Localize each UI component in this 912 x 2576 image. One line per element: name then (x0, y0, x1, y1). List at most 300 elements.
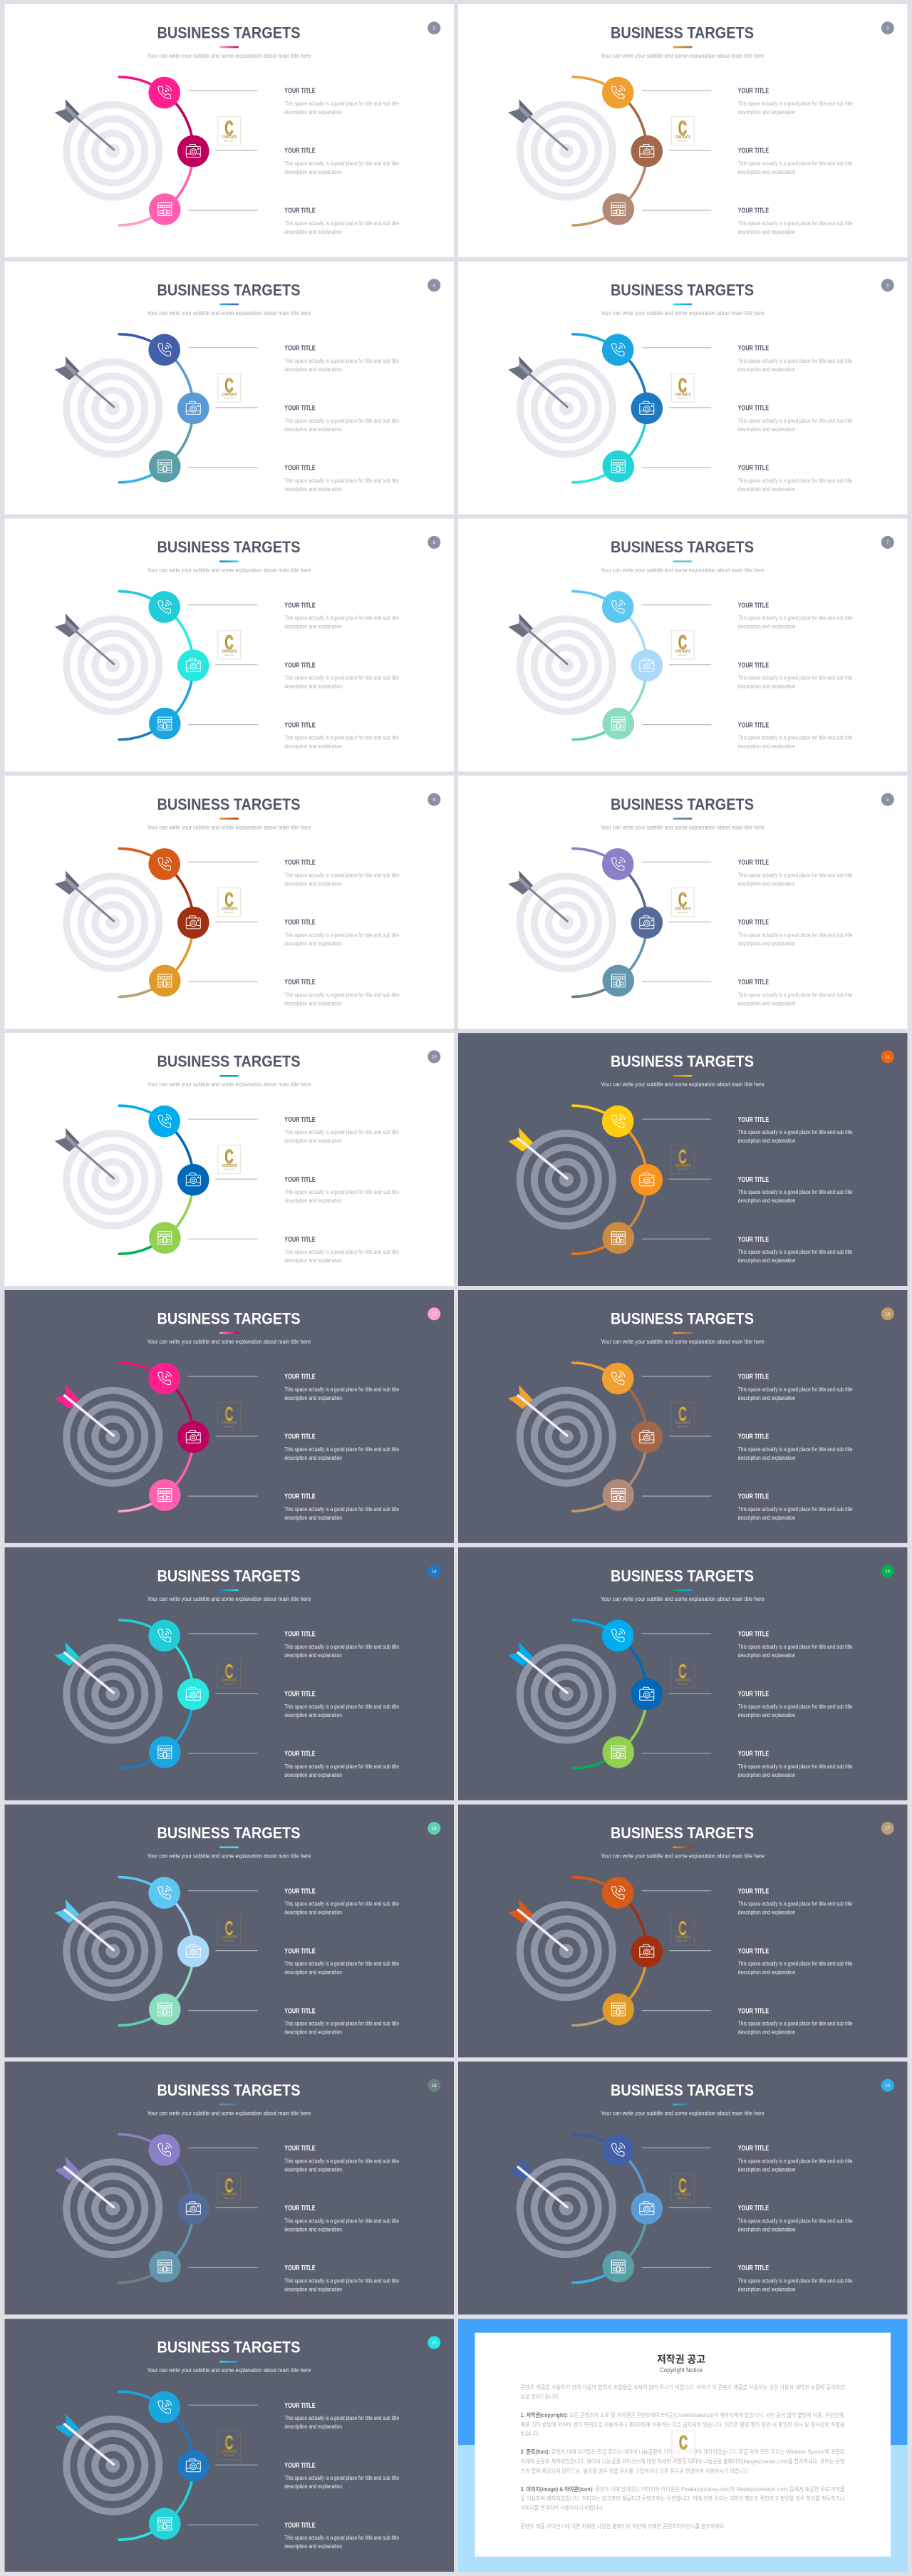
text block 1: description and explanation (738, 366, 795, 373)
target (63, 1387, 162, 1487)
node: camera (631, 1164, 663, 1196)
text block 1: YOUR TITLE (738, 858, 769, 867)
logo: CONTENTS (675, 135, 691, 140)
text block 2 (284, 661, 399, 690)
logo: C (678, 1917, 687, 1939)
panel: slide 8 light rust (4, 776, 454, 1029)
leader lines (188, 348, 258, 468)
logo: MAIL LIST (678, 1682, 688, 1685)
logo: CONTENTS (222, 650, 237, 654)
logo: CONTENTS (675, 1164, 691, 1168)
page badge: 15 (885, 1570, 891, 1574)
node: camera (631, 907, 663, 939)
text block 1 (738, 2144, 853, 2173)
arrow (508, 1642, 567, 1693)
text block 3: YOUR TITLE (284, 1493, 316, 1501)
text block 2 (284, 2461, 399, 2490)
logo: C (225, 1145, 234, 1168)
text block 1 (738, 1373, 853, 1401)
target (63, 101, 162, 201)
text block 2: description and explanation (738, 2226, 795, 2232)
text block 3: This space actually is a good place for title and sub title (738, 735, 853, 741)
text block 1: description and explanation (284, 1652, 342, 1659)
title: BUSINESS TARGETS (611, 2081, 754, 2099)
title: BUSINESS TARGETS (611, 1053, 754, 1071)
logo: MAIL LIST (678, 140, 688, 143)
text block 1: description and explanation (738, 1395, 795, 1401)
arrow (508, 99, 567, 150)
text block 1 (284, 1373, 399, 1401)
arrow (55, 2413, 113, 2464)
node: shop (603, 1994, 634, 2025)
text block 1: YOUR TITLE (284, 344, 316, 352)
panel: slide 2 light pink (4, 4, 454, 257)
text block 1 (738, 601, 853, 630)
node: shop (149, 1479, 181, 1511)
logo: MAIL LIST (224, 911, 234, 914)
text block 3: This space actually is a good place for title and sub title (738, 478, 853, 484)
subtitle: Your can write your subtitle and some explanation about main title here (147, 567, 311, 574)
text block 2: This space actually is a good place for title and sub title (284, 2475, 399, 2481)
title: BUSINESS TARGETS (157, 24, 301, 41)
subtitle: Your can write your subtitle and some explanation about main title here (147, 1081, 311, 1088)
text block 2: YOUR TITLE (738, 918, 769, 927)
arc (119, 2134, 193, 2282)
leader lines (188, 2405, 258, 2525)
text block 1: This space actually is a good place for title and sub title (284, 358, 399, 364)
page badge: 11 (886, 1056, 891, 1060)
arrow (55, 2156, 113, 2207)
node: shop (149, 1222, 181, 1254)
text block 2: This space actually is a good place for title and sub title (284, 2217, 399, 2224)
logo: C (678, 632, 687, 654)
text block 1 (284, 87, 399, 115)
text block 1 (738, 858, 853, 887)
copyright subheading: Copyright Notice (660, 2366, 703, 2374)
logo: MAIL LIST (224, 1939, 234, 1942)
logo: C (678, 117, 687, 139)
target (63, 2416, 162, 2515)
logo: C (225, 1660, 234, 1682)
logo: MAIL LIST (224, 1168, 234, 1171)
subtitle: Your can write your subtitle and some explanation about main title here (601, 2109, 765, 2116)
node: camera (631, 649, 663, 681)
text block 3: description and explanation (284, 229, 342, 235)
panel: slide 9 light purple (458, 776, 908, 1029)
page badge (881, 536, 894, 549)
text block 1: description and explanation (284, 2423, 342, 2430)
page badge: 5 (886, 284, 889, 288)
node: shop (603, 193, 634, 225)
subtitle: Your can write your subtitle and some explanation about main title here (601, 1338, 765, 1345)
text block 2: description and explanation (738, 1712, 795, 1719)
target (63, 358, 162, 458)
arc (573, 848, 647, 996)
arc (119, 1877, 193, 2026)
arc (119, 2391, 193, 2540)
text block 1: This space actually is a good place for title and sub title (284, 615, 399, 622)
text block 1 (738, 1116, 853, 1144)
logo (671, 1402, 694, 1431)
copyright body text (521, 2384, 845, 2530)
leader lines (642, 1891, 711, 2011)
text block 2: description and explanation (284, 1712, 342, 1719)
page badge (428, 1051, 440, 1063)
text block 3 (738, 207, 853, 235)
copyright body text: 3. 이미지(image) & 아이콘(icon): 콘텐츠 내에 담겨있는 이미지와 아이콘은 Pixabay(pixabay.com)와 Webalys(webalys.com) 등에서 제공한 무료 저작물 (521, 2485, 845, 2493)
target (517, 101, 616, 201)
arrow (55, 99, 114, 150)
title: BUSINESS TARGETS (611, 281, 754, 299)
text block 1 (738, 1629, 853, 1659)
text block 3: This space actually is a good place for title and sub title (738, 2021, 853, 2027)
text block 1 (284, 2144, 399, 2173)
arrow (55, 1642, 113, 1693)
accent bar (219, 818, 239, 820)
text block 3 (284, 207, 399, 235)
target (63, 872, 162, 972)
text block 2: description and explanation (284, 2226, 342, 2232)
logo: CONTENTS (675, 1679, 691, 1683)
node: camera (177, 1421, 209, 1453)
text block 2 (284, 1947, 399, 1976)
leader lines (188, 91, 258, 210)
arrow (508, 870, 567, 921)
panel: slide 4 light blue (4, 262, 454, 515)
text block 2: description and explanation (284, 169, 342, 175)
page badge: 19 (885, 2084, 891, 2088)
subtitle: Your can write your subtitle and some explanation about main title here (601, 1595, 765, 1602)
node: shop (149, 2251, 181, 2282)
text block 1: This space actually is a good place for title and sub title (738, 2158, 853, 2164)
text block 1 (284, 858, 399, 887)
node: camera (177, 1935, 209, 1967)
logo: C (679, 2431, 688, 2453)
logo (671, 1145, 694, 1173)
text block 1: This space actually is a good place for title and sub title (284, 1129, 399, 1135)
text block 2: YOUR TITLE (284, 661, 316, 669)
logo: MAIL LIST (678, 1426, 688, 1428)
text block 1: description and explanation (738, 2166, 795, 2173)
text block 1: YOUR TITLE (738, 1887, 769, 1895)
text block 2 (284, 1433, 399, 1461)
text block 2: This space actually is a good place for title and sub title (284, 160, 399, 167)
text block 2: YOUR TITLE (738, 1175, 769, 1184)
copyright body text: 이미지를 변경하여 사용하시기 바랍니다. (521, 2504, 604, 2511)
page badge (428, 279, 440, 292)
logo (218, 888, 241, 917)
arc (119, 334, 193, 483)
text block 1: This space actually is a good place for title and sub title (738, 1901, 853, 1907)
text block 2: YOUR TITLE (284, 2461, 316, 2470)
arrow (508, 1900, 567, 1950)
page badge: 10 (432, 1056, 437, 1060)
subtitle: Your can write your subtitle and some explanation about main title here (147, 2366, 311, 2374)
node: camera (177, 907, 209, 939)
text block 1: This space actually is a good place for title and sub title (284, 872, 399, 878)
text block 1: description and explanation (284, 366, 342, 373)
node: phone (602, 2134, 634, 2166)
text block 3 (284, 1235, 399, 1264)
text block 2: description and explanation (738, 426, 795, 433)
panel: slide 13 dark orange (458, 1290, 908, 1543)
text block 2: This space actually is a good place for title and sub title (738, 1446, 853, 1453)
text block 3 (738, 1749, 853, 1778)
text block 3: This space actually is a good place for title and sub title (284, 2535, 399, 2541)
text block 3 (738, 721, 853, 750)
arrow (55, 1128, 114, 1178)
text block 2: description and explanation (284, 1197, 342, 1204)
page badge (881, 1565, 894, 1577)
text block 2 (738, 403, 853, 433)
page badge (881, 1822, 894, 1835)
text block 3: YOUR TITLE (738, 2264, 769, 2272)
logo: MAIL LIST (678, 2197, 688, 2200)
text block 3 (738, 2006, 853, 2036)
text block 3: This space actually is a good place for title and sub title (738, 1763, 853, 1770)
node: shop (149, 193, 181, 225)
page badge (428, 1822, 440, 1835)
logo: CONTENTS (675, 1936, 691, 1940)
text block 2: This space actually is a good place for title and sub title (738, 2217, 853, 2224)
accent bar (673, 1075, 693, 1077)
text block 1: This space actually is a good place for title and sub title (284, 2158, 399, 2164)
text block 1 (284, 1629, 399, 1659)
node: phone (148, 1619, 180, 1652)
text block 1 (738, 1887, 853, 1916)
text block 3 (284, 1749, 399, 1778)
page badge: 6 (433, 541, 436, 545)
text block 2: description and explanation (284, 426, 342, 433)
title: BUSINESS TARGETS (157, 281, 301, 299)
logo: C (678, 1660, 687, 1682)
panel: copyright notice (458, 2319, 908, 2572)
text block 3: YOUR TITLE (738, 1750, 769, 1758)
target (517, 1387, 616, 1487)
page badge (428, 21, 440, 34)
logo (218, 373, 241, 402)
leader lines (642, 1634, 711, 1753)
text block 2: description and explanation (738, 169, 795, 175)
text block 1: This space actually is a good place for title and sub title (738, 1644, 853, 1650)
text block 3: This space actually is a good place for title and sub title (284, 991, 399, 998)
page badge (881, 21, 894, 34)
text block 1: This space actually is a good place for title and sub title (738, 872, 853, 878)
text block 2: This space actually is a good place for title and sub title (738, 1704, 853, 1710)
target (517, 1644, 616, 1743)
logo (671, 116, 694, 145)
text block 1: YOUR TITLE (284, 601, 316, 609)
text block 2: YOUR TITLE (284, 147, 316, 155)
copyright body text: 자체의 글꼴로 제작되었습니다. 네이버 나눔글꼴 라이선스에 대한 자세한 사항은 네이버 나눔글꼴 홈페이지(hangeul.naver.com)를 참조하세요. 폰트는 콘텐 (521, 2458, 845, 2465)
text block 3: This space actually is a good place for title and sub title (284, 1506, 399, 1513)
node: camera (177, 1678, 209, 1710)
text block 3: YOUR TITLE (738, 2006, 769, 2015)
arrow (508, 356, 567, 407)
accent bar (673, 818, 693, 820)
logo: MAIL LIST (224, 654, 234, 656)
text block 3: This space actually is a good place for title and sub title (738, 1506, 853, 1513)
logo: C (225, 1403, 234, 1425)
text block 2 (738, 1947, 853, 1976)
text block 2: description and explanation (284, 684, 342, 690)
text block 3 (284, 463, 399, 493)
logo: MAIL LIST (678, 1168, 688, 1171)
page badge: 9 (886, 798, 889, 803)
panel: slide 17 dark rust (458, 1805, 908, 2057)
arc (119, 592, 193, 740)
node: shop (603, 2251, 634, 2282)
leader lines (642, 348, 711, 468)
text block 3 (738, 1235, 853, 1264)
text block 1: YOUR TITLE (738, 344, 769, 352)
text block 1: YOUR TITLE (284, 1373, 316, 1381)
text block 2: YOUR TITLE (738, 1433, 769, 1441)
text block 2: This space actually is a good place for title and sub title (284, 1189, 399, 1195)
text block 1: description and explanation (738, 1910, 795, 1916)
page badge (881, 1051, 894, 1063)
page badge (428, 793, 440, 806)
text block 1: YOUR TITLE (284, 2144, 316, 2153)
leader lines (642, 91, 711, 210)
text block 2: YOUR TITLE (738, 403, 769, 412)
text block 2 (284, 918, 399, 947)
title: BUSINESS TARGETS (611, 1310, 754, 1327)
panel: slide 12 dark pink (4, 1290, 454, 1543)
accent bar (673, 1846, 693, 1848)
leader lines (188, 1634, 258, 1753)
accent bar (673, 1590, 693, 1591)
text block 1: YOUR TITLE (284, 2401, 316, 2410)
logo: CONTENTS (222, 1679, 237, 1683)
logo (218, 116, 241, 145)
node: shop (149, 708, 181, 739)
logo (672, 2431, 695, 2458)
title: BUSINESS TARGETS (611, 1824, 754, 1842)
text block 1: description and explanation (284, 624, 342, 630)
target (517, 1901, 616, 2001)
text block 1: YOUR TITLE (284, 1887, 316, 1895)
arc (573, 2134, 647, 2282)
node: shop (603, 1222, 634, 1254)
node: shop (603, 450, 634, 483)
panel: slide 10 light blue-green (4, 1033, 454, 1286)
text block 1: description and explanation (284, 109, 342, 115)
arc (573, 1877, 647, 2026)
node: phone (148, 1363, 180, 1394)
page badge: 12 (432, 1313, 437, 1317)
text block 3: This space actually is a good place for title and sub title (738, 2277, 853, 2284)
logo (671, 888, 694, 917)
text block 2: This space actually is a good place for title and sub title (738, 1189, 853, 1195)
logo: C (678, 1145, 687, 1168)
panel: slide 14 dark teal (4, 1547, 454, 1800)
text block 2: description and explanation (738, 684, 795, 690)
arc (573, 1620, 647, 1768)
text block 3 (284, 1493, 399, 1521)
text block 3: This space actually is a good place for title and sub title (284, 2021, 399, 2027)
node: phone (148, 1877, 180, 1909)
accent bar (219, 1075, 239, 1077)
arrow (55, 356, 114, 407)
logo (671, 1917, 694, 1945)
logo (218, 2174, 241, 2203)
text block 2: YOUR TITLE (738, 1947, 769, 1955)
text block 2: description and explanation (284, 1969, 342, 1976)
logo: CONTENTS (222, 907, 237, 911)
logo (218, 1145, 241, 1173)
title: BUSINESS TARGETS (157, 2081, 301, 2099)
logo (218, 1402, 241, 1431)
title: BUSINESS TARGETS (157, 2339, 301, 2356)
page badge: 13 (885, 1313, 891, 1317)
text block 3: YOUR TITLE (284, 2264, 316, 2272)
text block 3: YOUR TITLE (284, 1235, 316, 1244)
page badge (428, 536, 440, 549)
arc (573, 592, 647, 740)
text block 3: This space actually is a good place for title and sub title (284, 220, 399, 227)
subtitle: Your can write your subtitle and some explanation about main title here (601, 52, 765, 59)
text block 3: description and explanation (738, 1257, 795, 1264)
arc (573, 334, 647, 483)
node: camera (177, 2450, 209, 2482)
logo (218, 631, 241, 659)
page badge: 4 (433, 284, 436, 288)
panel: slide 5 light sky (458, 262, 908, 515)
text block 2 (284, 147, 399, 175)
logo: CONTENTS (222, 1936, 237, 1940)
text block 2 (284, 1175, 399, 1204)
node: shop (603, 1736, 634, 1768)
page badge: 8 (433, 798, 436, 803)
text block 3: description and explanation (738, 743, 795, 750)
copyright body text: 2. 폰트(font): 콘텐츠 내에 담겨있는 한글 폰트는 네이버 나눔글꼴의 저작권을 이용하여 제작되었습니다. 한글 외의 모든 폰트는 Windows System에 포함된 (521, 2448, 845, 2456)
text block 1: YOUR TITLE (738, 1373, 769, 1381)
logo: C (678, 374, 687, 396)
logo (218, 2431, 241, 2459)
logo: MAIL LIST (224, 2197, 234, 2200)
node: camera (631, 135, 663, 167)
text block 1: This space actually is a good place for title and sub title (284, 1644, 399, 1650)
text block 3 (738, 1493, 853, 1521)
logo (671, 2174, 694, 2203)
logo: MAIL LIST (678, 1939, 688, 1942)
leader lines (188, 862, 258, 982)
text block 2: YOUR TITLE (738, 2204, 769, 2212)
node: phone (602, 1106, 634, 1138)
text block 1 (284, 1116, 399, 1144)
text block 2: description and explanation (738, 940, 795, 947)
text block 3: description and explanation (738, 2286, 795, 2292)
title: BUSINESS TARGETS (157, 1053, 301, 1071)
text block 1: YOUR TITLE (284, 87, 316, 96)
leader lines (188, 2148, 258, 2267)
title: BUSINESS TARGETS (157, 1567, 301, 1585)
node: camera (177, 649, 209, 681)
text block 1: YOUR TITLE (284, 858, 316, 867)
node: shop (149, 450, 181, 483)
text block 2 (738, 661, 853, 690)
subtitle: Your can write your subtitle and some explanation about main title here (601, 309, 765, 316)
text block 1 (284, 601, 399, 630)
node: shop (603, 1479, 634, 1511)
logo: CONTENTS (222, 1421, 237, 1426)
accent bar (219, 1332, 239, 1334)
text block 3 (738, 2264, 853, 2292)
title: BUSINESS TARGETS (611, 24, 754, 41)
logo: C (678, 888, 687, 910)
text block 1: This space actually is a good place for title and sub title (284, 101, 399, 107)
